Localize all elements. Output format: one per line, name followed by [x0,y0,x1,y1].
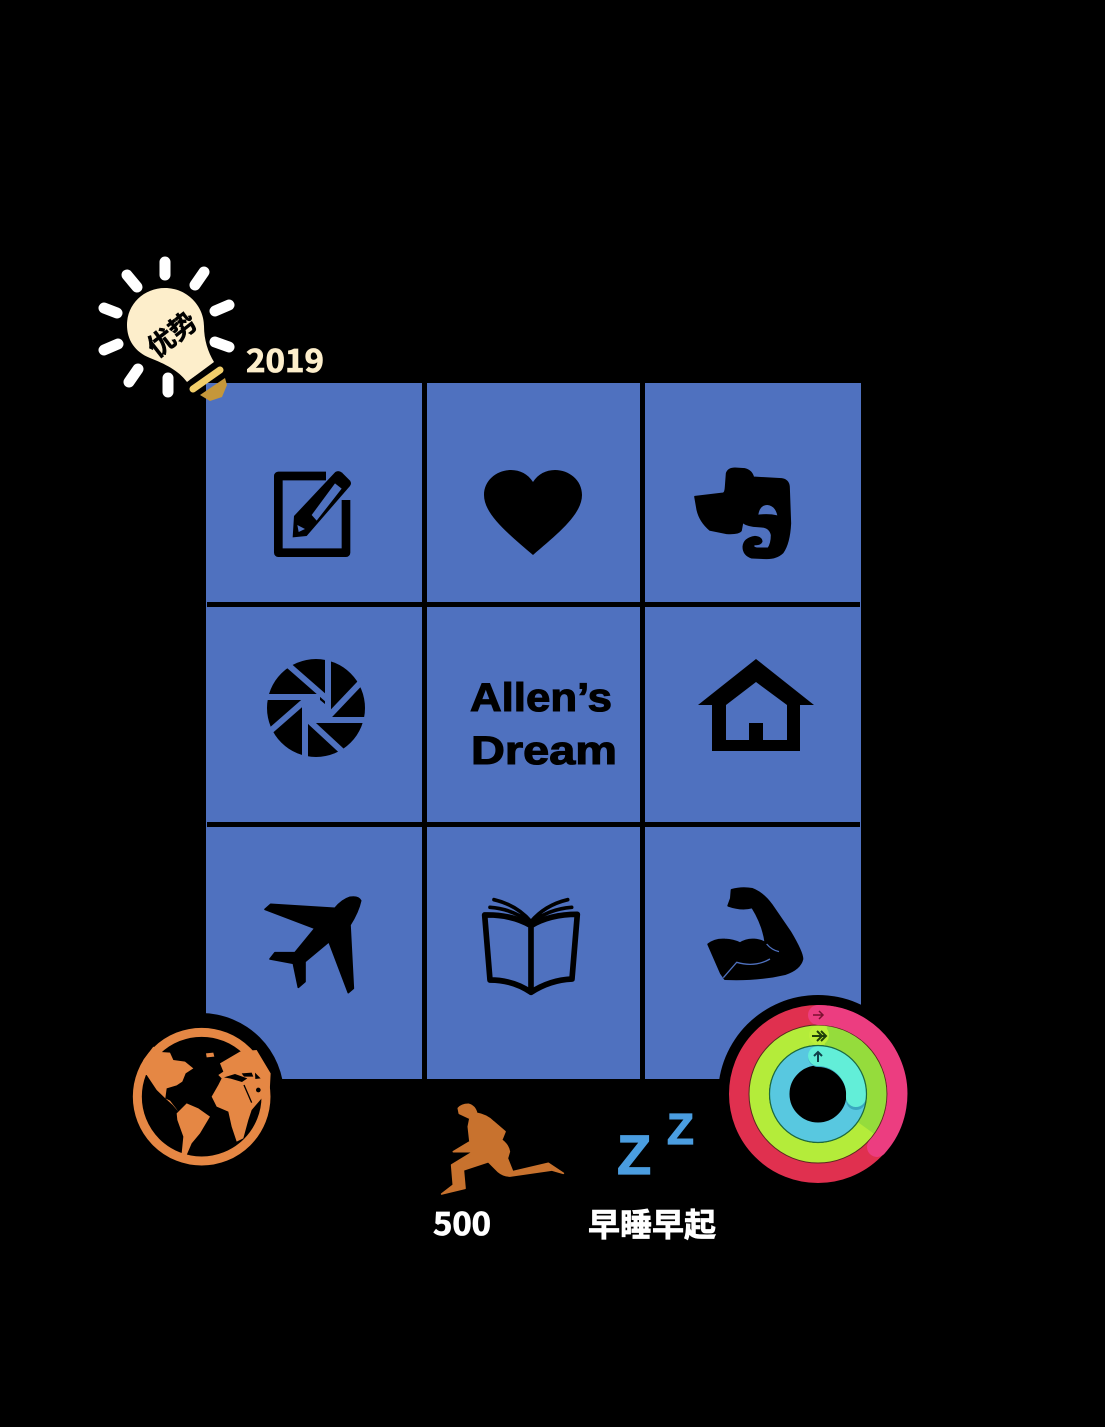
icon: flexed arm [708,888,802,979]
text: Allen's Dream [470,676,617,773]
icon: heart [484,470,582,555]
icon: sleep Z letters [617,1105,694,1186]
icon: running figure [442,1104,563,1194]
icon: house [698,659,814,751]
text: year 2019: 2019 [246,336,324,381]
backing circle: globe cutout [118,1013,284,1179]
icon: edit note with pencil [278,471,351,553]
icon: open book [485,900,577,992]
text: 优势 on bulb: 优势 [138,301,204,365]
pink move arc [818,1015,897,1147]
text: Allen's Dream: Allen’s [470,676,612,720]
cyan stand ring [770,1046,866,1142]
icon: orange globe [137,1032,271,1161]
icon: sleep Z letters: Z [667,1105,694,1154]
green exercise ring [749,1025,887,1163]
text: 早睡早起: 早睡早起 [588,1200,716,1246]
panel: blue 3x3 grid [206,383,861,1079]
red move ring base [739,1015,897,1173]
ring arrows [812,1011,826,1062]
backing circle: rings cutout [718,995,918,1195]
icon: camera aperture [264,655,368,760]
icon: sleep Z letters: Z [617,1123,651,1186]
text: Allen's Dream: Dream [471,729,617,773]
icon: airplane [265,897,361,993]
icon: elephant [695,468,790,558]
icon: light bulb with rays [104,262,229,401]
text: 500: 500 [433,1199,491,1244]
icon: activity rings [739,1011,897,1173]
